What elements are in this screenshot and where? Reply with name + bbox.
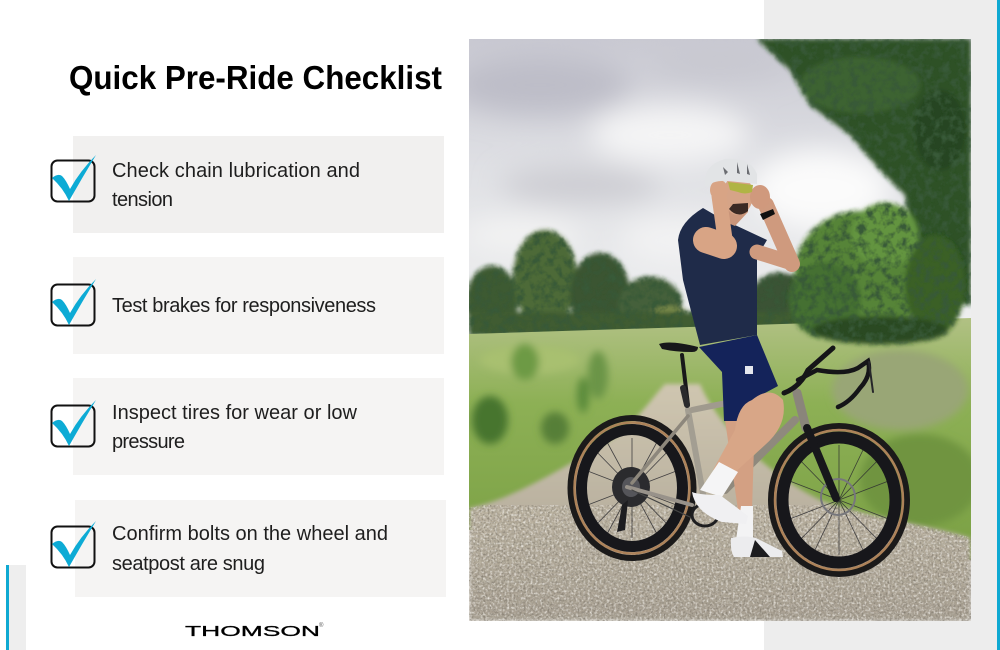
rider: sunglasses (728, 182, 753, 194)
chainring and crank (692, 504, 718, 526)
photo background: grass field (469, 318, 971, 560)
rider: wrist band (760, 209, 775, 220)
rider: right arm (757, 205, 792, 264)
text: item 3: pressure (112, 431, 185, 453)
rider: left arm (706, 196, 726, 246)
text: item 1 (112, 160, 360, 211)
panel: grey right background (764, 0, 997, 650)
text: item 4: Confirm bolts on the wheel and (112, 523, 388, 545)
rider: helmet (712, 162, 757, 184)
text: item 1: Check chain lubrication and (112, 160, 360, 182)
rider: left hand (710, 181, 726, 196)
brake disc (821, 479, 855, 515)
icon: checked box 2 (52, 279, 96, 326)
text: item 4: seatpost are snug (112, 553, 265, 575)
icon: checked box 4 (52, 521, 96, 568)
photo background: tree canopy top right (757, 39, 971, 305)
rider: shorts logo (745, 366, 753, 374)
rider: neck and head (726, 181, 752, 226)
logo: Thomson wordmark (185, 622, 324, 640)
accent: right blue edge (997, 0, 1000, 650)
handlebars (784, 348, 873, 407)
panel: checklist item 4 (52, 500, 446, 597)
panel: checklist item 2 (52, 257, 444, 354)
text: item 1: tension (112, 189, 173, 211)
rider: far leg (725, 415, 783, 557)
rear wheel (570, 418, 694, 558)
photo: cyclist with gravel bike on a trail (450, 39, 980, 621)
panel: checklist item 3 (52, 378, 444, 475)
cassette and rear derailleur (612, 467, 650, 532)
photo background: mid-right bright tree (789, 203, 965, 344)
bike (570, 343, 907, 574)
front wheel (771, 426, 907, 574)
icon: checked box 3 (52, 400, 96, 446)
photo background: sky (469, 39, 971, 312)
panel: grey bottom-left strip with blue edge (6, 565, 26, 650)
text: item 3 (112, 402, 358, 453)
photo background: distant trees (466, 230, 812, 338)
rider: near sock (700, 462, 738, 497)
rider: right hand (750, 185, 770, 209)
text: item 2: Test brakes for responsiveness (112, 295, 376, 317)
text: item 4 (112, 523, 388, 575)
title: Quick Pre-Ride Checklist (69, 59, 442, 96)
rider (678, 159, 792, 557)
text: item 3: Inspect tires for wear or low (112, 402, 358, 424)
rider: shirt (678, 208, 767, 345)
rider: shorts (699, 335, 778, 421)
frame (627, 355, 836, 518)
photo background: gravel trail (469, 384, 971, 621)
logo: Thomson wordmark: THOMSON (185, 623, 320, 640)
rider: near shoe (692, 492, 740, 524)
logo: Thomson wordmark: ® (319, 622, 324, 629)
rider: near leg (713, 392, 784, 475)
saddle (659, 343, 698, 352)
photo background: grass highlights (472, 344, 980, 526)
panel: checklist item 1 (52, 136, 444, 233)
icon: checked box 1 (52, 155, 96, 202)
